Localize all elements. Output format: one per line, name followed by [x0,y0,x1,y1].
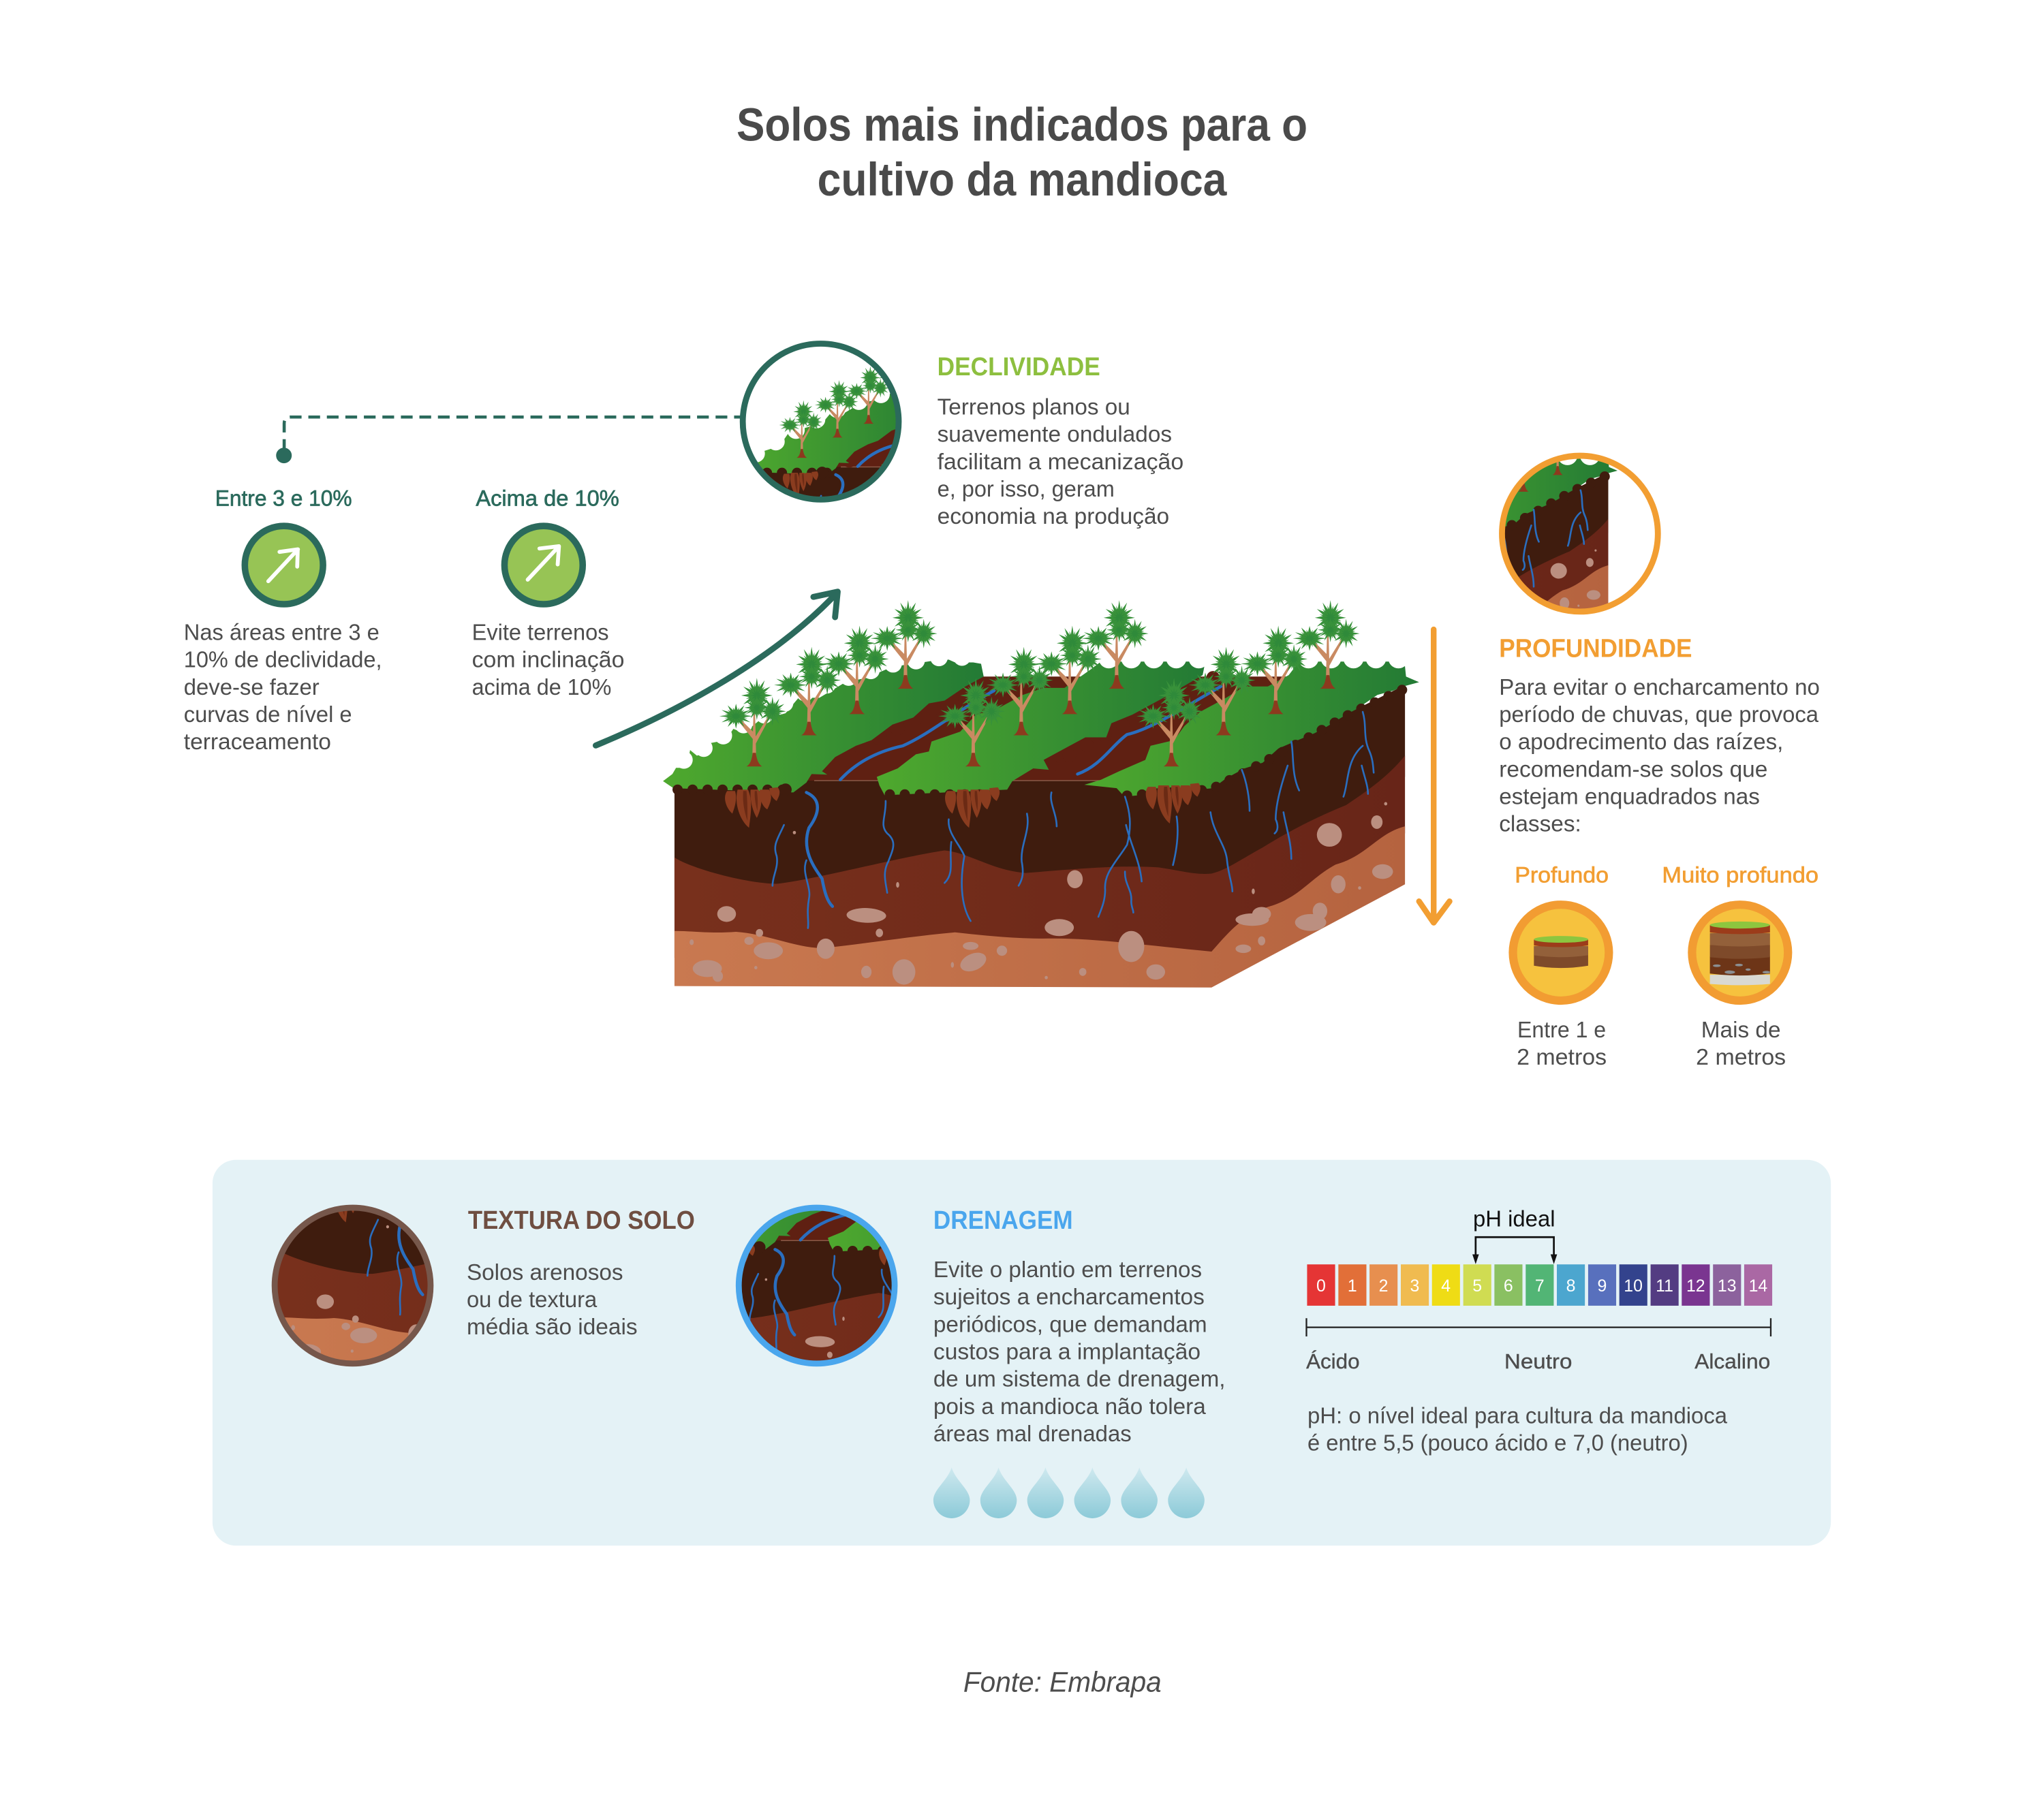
text: advice above 10 percent [472,620,624,700]
pH colour squares: 0 [1316,1276,1326,1296]
text block: profundidade: classes: [1499,812,1581,837]
soil block illustration [663,600,1419,988]
pH colour squares: 13 [1718,1276,1737,1296]
pH colour squares: 5 [1472,1276,1482,1296]
arrow: soil depth [1419,629,1450,923]
label: pH ideal with bracket [1472,1206,1557,1264]
depth class: muito profundo [1662,862,1818,1070]
icon: water drops [933,1467,1205,1518]
text block: drenagem: Evite o plantio em terrenos [933,1257,1202,1283]
icon: shallow soil cylinder [1508,900,1613,1005]
text block: declividade: DECLIVIDADE [938,352,1100,381]
title [737,99,1307,206]
depth class: profundo [1508,862,1613,1070]
text block: declividade: economia na produção [938,504,1169,529]
text block: declividade: suavemente ondulados [938,422,1172,448]
text: advice above 10 percent: Evite terrenos [472,620,608,645]
scale axis [1306,1318,1771,1336]
text block: declividade [938,352,1183,529]
pH colour squares: 1 [1348,1276,1357,1296]
axis labels: Ácido [1306,1349,1360,1373]
text: advice for 3 to 10 percent: 10% de declividade, [184,648,382,673]
pH colour squares: 11 [1656,1276,1673,1296]
text block: declividade: facilitam a mecanização [938,450,1183,475]
text: advice above 10 percent: com inclinação [472,648,624,673]
text block: profundidade [1499,633,1820,837]
icon: slope detail circle [740,341,902,503]
text block: drenagem: periódicos, que demandam [933,1312,1207,1337]
pH colour squares: 9 [1597,1276,1607,1296]
text: depth range: 2 metros [1517,1045,1607,1070]
text: depth range [1517,1018,1607,1070]
title: cultivo da mandioca [818,153,1227,206]
text block: pH note: é entre 5,5 (pouco ácido e 7,0 (neutro) [1307,1430,1688,1456]
pH colour squares: 8 [1566,1276,1575,1296]
panel: bottom soil attributes [213,1159,1831,1546]
axis labels: Alcalino [1694,1350,1770,1373]
panel: slope range 3 to 10 percent [184,486,382,755]
text: advice for 3 to 10 percent [184,620,382,755]
dashed connector from slope circle to range labels [276,417,745,463]
text: advice for 3 to 10 percent: curvas de nível e [184,702,352,727]
depth class: muito profundo: Muito profundo [1662,862,1818,887]
source note: Fonte: Embrapa [963,1665,1162,1697]
depth class: profundo: Profundo [1515,862,1609,887]
icon: slope arrow [504,526,583,604]
text block: drenagem: sujeitos a encharcamentos [933,1285,1205,1310]
text block: drenagem: pois a mandioca não tolera [933,1394,1206,1420]
label: acima de 10%: Acima de 10% [476,486,619,510]
icon: drainage circle [736,1204,898,1366]
pH colour squares: 4 [1441,1276,1451,1296]
pH colour squares: 12 [1686,1276,1705,1296]
label: entre 3 e 10%: Entre 3 e 10% [215,486,352,510]
axis labels: Neutro [1504,1350,1572,1373]
text block: profundidade: Para evitar o encharcamento no [1499,675,1820,700]
pH colour squares: 3 [1410,1276,1419,1296]
text block: profundidade: PROFUNDIDADE [1499,633,1692,663]
pH colour squares: 7 [1535,1276,1545,1296]
title: Solos mais indicados para o [737,99,1307,151]
pH colour squares: 2 [1379,1276,1388,1296]
pH colour squares: 10 [1624,1276,1643,1296]
text block: drenagem: DRENAGEM [933,1206,1073,1235]
text: depth range [1696,1018,1786,1070]
pH colour squares: 6 [1504,1276,1513,1296]
text block: profundidade: estejam enquadrados nas [1499,784,1760,809]
icon: slope arrow [245,526,323,604]
text block: textura do solo: ou de textura [467,1287,598,1313]
arrow: slope direction [595,592,837,745]
icon: deep soil cylinder [1688,900,1792,1005]
panel: slope above 10 percent [472,486,624,700]
pH colour squares [1307,1264,1772,1306]
icon: soil texture circle [271,1204,433,1366]
text: depth range: 2 metros [1696,1045,1786,1070]
text block: textura do solo [467,1206,695,1340]
text block: pH note: pH: o nível ideal para cultura da mandioca [1307,1403,1727,1428]
text block: profundidade: recomendam-se solos que [1499,757,1767,782]
text block: declividade: e, por isso, geram [938,477,1115,502]
text block: drenagem: de um sistema de drenagem, [933,1367,1225,1392]
text block: textura do solo: TEXTURA DO SOLO [468,1206,695,1235]
text: advice above 10 percent: acima de 10% [472,675,611,700]
pH colour squares: 14 [1749,1276,1767,1296]
text block: drenagem: áreas mal drenadas [933,1422,1132,1447]
text block: pH note [1307,1403,1727,1456]
text block: textura do solo: média são ideais [467,1315,638,1340]
text: advice for 3 to 10 percent: Nas áreas entre 3 e [184,620,380,645]
chart: pH scale [1306,1206,1772,1373]
text: depth range: Mais de [1701,1018,1781,1043]
text block: profundidade: período de chuvas, que provoca [1499,702,1818,727]
text block: textura do solo: Solos arenosos [467,1260,623,1285]
text block: profundidade: o apodrecimento das raízes, [1499,730,1783,755]
text block: declividade: Terrenos planos ou [938,394,1130,420]
text block: drenagem: custos para a implantação [933,1340,1201,1365]
axis labels [1306,1349,1770,1373]
label: pH ideal with bracket: pH ideal [1473,1206,1555,1232]
text: advice for 3 to 10 percent: deve-se fazer [184,675,320,700]
text: advice for 3 to 10 percent: terraceamento [184,730,331,755]
text block: drenagem [933,1206,1225,1447]
icon: depth detail circle [1499,452,1661,614]
text: depth range: Entre 1 e [1517,1018,1606,1043]
